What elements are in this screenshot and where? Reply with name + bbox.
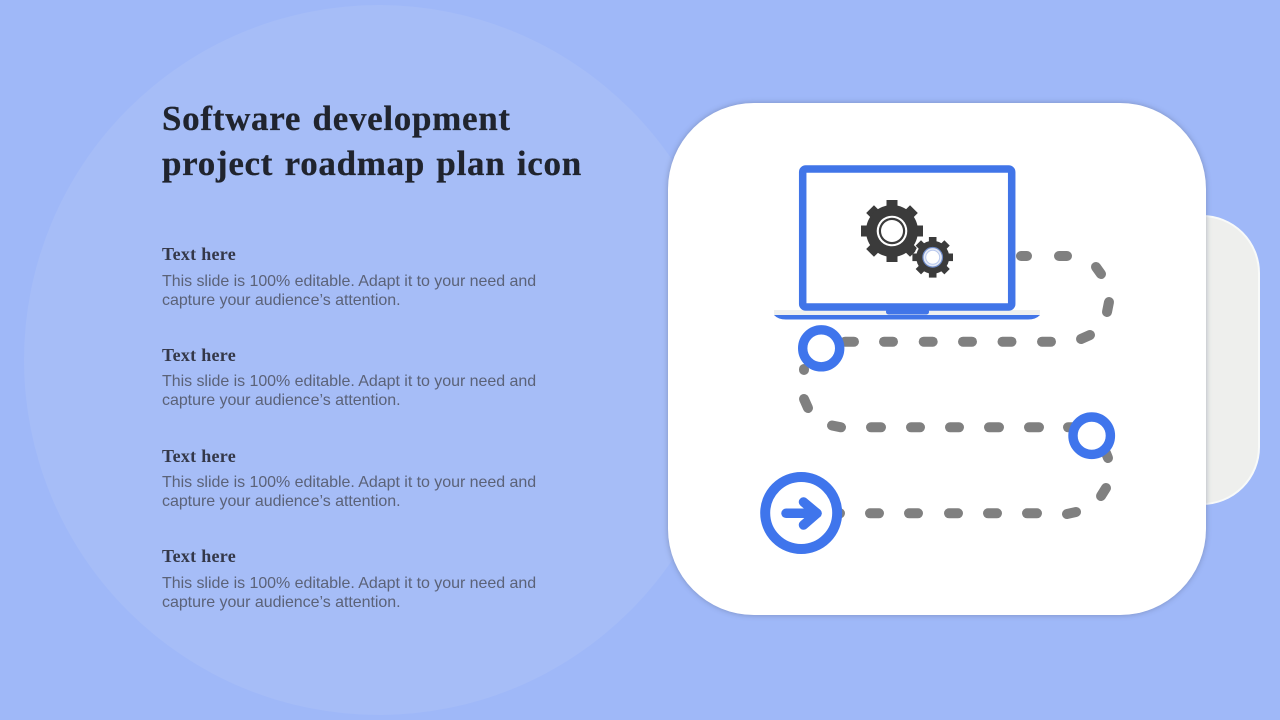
text block 3 bbox=[162, 446, 536, 510]
back card bbox=[1100, 215, 1260, 505]
start marker with arrow bbox=[765, 477, 837, 549]
background circle bbox=[24, 5, 734, 715]
text block 1 bbox=[162, 244, 536, 309]
waypoint marker: right bbox=[1073, 417, 1110, 454]
icon: large gear bbox=[861, 200, 923, 262]
text block 3: capture your audience’s attention. bbox=[162, 493, 401, 510]
text block 2 bbox=[162, 345, 536, 409]
text block 3: Text here bbox=[162, 446, 236, 466]
icon: small gear bbox=[912, 237, 953, 278]
text block 1: capture your audience’s attention. bbox=[162, 292, 401, 309]
dashed roadmap path bbox=[804, 256, 1109, 514]
white icon card bbox=[668, 103, 1206, 615]
text block 4: This slide is 100% editable. Adapt it to your need and bbox=[162, 575, 536, 592]
title bbox=[162, 99, 582, 183]
text block 2: capture your audience’s attention. bbox=[162, 392, 401, 409]
text block 2: Text here bbox=[162, 345, 236, 365]
text block 4: Text here bbox=[162, 546, 236, 566]
waypoint marker: upper left bbox=[803, 330, 840, 367]
title: Software development bbox=[162, 99, 511, 138]
text block 2: This slide is 100% editable. Adapt it to your need and bbox=[162, 373, 536, 390]
text block 1: Text here bbox=[162, 244, 236, 264]
text block 4 bbox=[162, 546, 536, 611]
title: project roadmap plan icon bbox=[162, 144, 582, 183]
text block 3: This slide is 100% editable. Adapt it to your need and bbox=[162, 474, 536, 491]
icon: laptop bbox=[774, 169, 1040, 320]
text block 1: This slide is 100% editable. Adapt it to your need and bbox=[162, 273, 536, 290]
text block 4: capture your audience’s attention. bbox=[162, 594, 401, 611]
